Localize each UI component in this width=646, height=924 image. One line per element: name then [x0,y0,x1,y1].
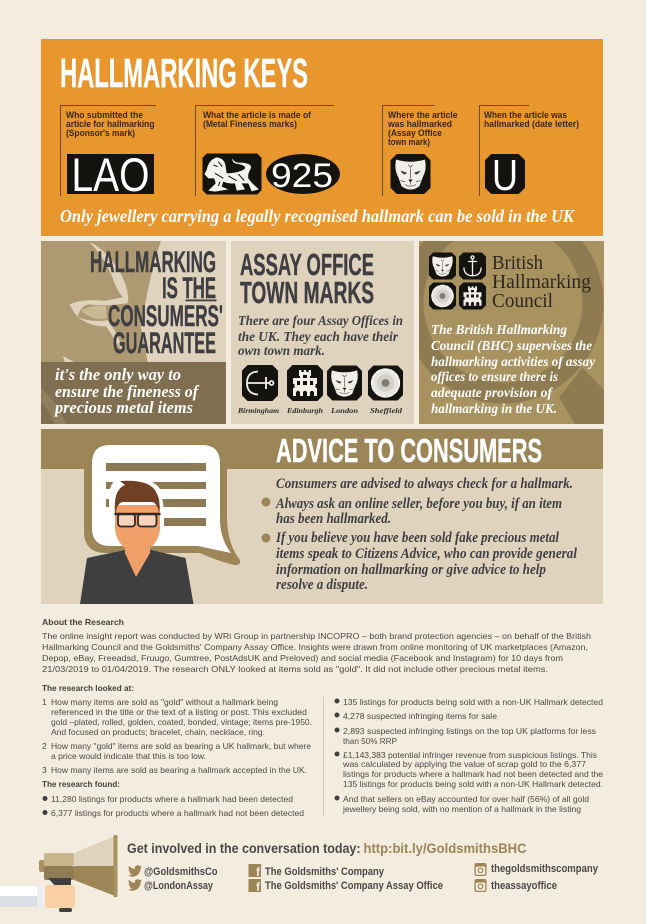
research summary paragraph: Hallmarking Council and the Goldsmiths' Company Assay Office. Insights were drawn from online monitoring of UK marketplaces (Amazon, [42,642,588,652]
heading: hallmarking is the consumers' guarantee: HALLMARKING [90,246,216,279]
social: instagram: thegoldsmithscompany [491,863,599,875]
findings list, right column [334,697,603,814]
town mark: Edinburgh [286,366,323,415]
findings list, right column: £1,143,383 potential infringer revenue from suspicious listings. This [343,750,597,760]
headline: get involved: Get involved in the conversation today: [127,840,360,856]
numbered list [42,697,312,775]
key: date letter: hallmarked (date letter) [484,119,579,129]
key: assay office town mark: town mark) [388,137,430,147]
logo: british hallmarking council: British [492,252,543,274]
town mark: Birmingham [237,366,279,415]
bullet: ask the seller [262,496,562,527]
callout band: only way to ensure fineness: ensure the fineness of [55,382,199,401]
town mark: Sheffield: Sheffield [370,406,402,415]
findings list, right column: 4,278 suspected infringing items for sale [343,711,497,721]
heading: hallmarking is the consumers' guarantee [90,246,223,360]
social: twitter [128,865,218,892]
key: metal fineness marks: (Metal Fineness marks) [203,119,297,129]
logo: british hallmarking council: Hallmarking [492,271,591,293]
panel: advice to consumers [41,429,603,604]
panel: consumers' guarantee [41,241,226,424]
research summary paragraph: The online insight report was conducted by WRi Group in partnership INCOPRO – both brand protection agencies – on behalf of the British [42,631,591,641]
illustration: man with speech bubble [80,438,240,604]
icon: leopard mark [392,155,429,193]
research summary paragraph: 21/03/2019 to 01/04/2019. The research ONLY looked at items sold as "gold". It did not include other precious metal items. [42,664,548,674]
icon: LAO mark: LAO [72,148,150,201]
panel: british hallmarking council [419,241,604,424]
town mark: London [328,366,361,415]
bullet: citizens advice: If you believe you have been sold fake precious metal [275,530,560,546]
numbered list: referenced in the title or the text of a listing or post. This excluded [51,707,307,717]
town mark: Edinburgh: Edinburgh [286,406,323,415]
BHC description: hallmarking activities of assay [431,355,596,370]
leopard face background [41,241,161,363]
panel: assay office town marks [231,241,414,424]
heading: hallmarking is the consumers' guarantee: GUARANTEE [113,327,216,360]
social: twitter: @GoldsmithsCo [144,866,218,878]
social: instagram [474,863,599,892]
key: date letter [480,106,579,200]
social: instagram: theassayoffice [491,880,557,892]
findings list, right column: And that sellers on eBay accounted for over half (56%) of all gold [343,794,589,804]
research summary paragraph [42,631,591,674]
social: twitter: @LondonAssay [144,880,214,892]
town mark: Sheffield [369,366,402,415]
key: assay office town mark [382,106,458,196]
findings list, right column: was calculated by applying the value of scrap gold to the 6,377 [342,759,586,769]
numbered list: How many items are sold as bearing a hallmark accepted in the UK. [51,765,307,775]
icon: date letter U: U [492,151,518,200]
key: sponsor's mark [60,106,156,201]
intro line: Consumers are advised to always check for a hallmark. [276,476,573,492]
section: about the research [42,617,603,818]
icon: 925 mark: 925 [271,157,333,195]
key: metal fineness marks: What the article is made of [203,110,312,120]
key: assay office town mark: was hallmarked [387,119,452,129]
town mark: London: London [330,406,358,415]
heading: assay office town marks: ASSAY OFFICE [240,247,374,282]
findings list, right column: jewellery being sold, with no mention of a hallmark in the listing [342,804,581,814]
findings list, right column: than 50% RRP [343,736,397,746]
key: assay office town mark: (Assay Office [388,128,442,138]
numbered list: And focused on products; bracelet, chain, necklace, ring. [51,727,265,737]
icon: lion mark [203,154,261,194]
icon: megaphone in hand [0,835,118,912]
BHC description: Council (BHC) supervises the [431,339,592,354]
ring background [419,241,604,424]
intro text: There are four Assay Offices in [238,313,403,328]
social: facebook [248,864,443,894]
bullet: citizens advice [262,530,578,593]
social: facebook: f [256,880,261,894]
key: sponsor's mark: article for hallmarking [66,119,154,129]
tagline: Only jewellery carrying a legally recognised hallmark can be sold in the UK [60,206,576,226]
research summary paragraph: Depop, eBay, Freeadsd, Fruugo, Gumtree, PostAdsUK and Preloved) and social media (Facebook and Instagram) for 10 days from [42,653,563,663]
numbered list: 3 [42,765,47,775]
logo: british hallmarking council [430,252,591,312]
social: facebook: The Goldsmiths' Company [265,866,385,878]
logo: british hallmarking council: Council [492,290,553,312]
callout band: only way to ensure fineness: it's the only way to [55,365,181,384]
bullet: citizens advice: resolve a dispute. [276,577,368,593]
subheading: the research looked at: The research looked at: [42,683,134,693]
intro text [238,313,403,358]
callout band: only way to ensure fineness: precious metal items [53,398,193,417]
BHC description [431,323,596,417]
findings list, left column [42,794,304,818]
numbered list: How many items are sold as "gold" without a hallmark being [51,697,278,707]
findings list, left column: 6,377 listings for products where a hallmark had not been detected [51,808,304,818]
numbered list: 2 [42,741,47,751]
link: bit.ly: http:bit.ly/GoldsmithsBHC [364,840,526,856]
heading: hallmarking is the consumers' guarantee: CONSUMERS' [108,300,223,333]
bullet: ask the seller: Always ask an online seller, before you buy, if an item [275,496,562,512]
findings list, right column: listings for products where a hallmark had not been detected and the [343,769,603,779]
BHC description: offices to ensure there is [431,370,558,385]
key: date letter: When the article was [484,110,567,120]
key: sponsor's mark: Who submitted the [66,110,143,120]
subheading: the research found: The research found: [42,779,120,789]
bullet: ask the seller: has been hallmarked. [276,511,391,527]
findings list, right column: 135 listings for products being sold with a non-UK Hallmark detected. [343,779,603,789]
numbered list: gold –plated, rolled, golden, coated, bonded, vintage; items pre-1950. [51,717,312,727]
footer: get involved [0,835,599,912]
intro text: the UK. They each have their [238,329,399,344]
key: metal fineness marks [196,106,340,196]
findings list, left column: 11,280 listings for products where a hallmark had been detected [51,794,293,804]
title: hallmarking keys: HALLMARKING KEYS [60,50,308,96]
bullet: citizens advice: items speak to Citizens Advice, who can provide general [276,546,578,562]
numbered list: 1 [42,697,47,707]
social: facebook: f [256,865,261,879]
BHC description: The British Hallmarking [431,323,567,338]
panel: hallmarking keys [41,39,603,236]
callout band: only way to ensure fineness [41,362,226,424]
heading: about the research: About the Research [42,617,124,627]
heading: assay office town marks: TOWN MARKS [240,275,374,310]
BHC description: hallmarking in the UK. [431,402,557,417]
social: facebook: The Goldsmiths' Company Assay Office [265,880,443,892]
numbered list: How many "gold" items are sold as bearing a UK hallmark, but where [51,741,311,751]
heading: assay office town marks [240,247,374,310]
key: sponsor's mark: (Sponsor's mark) [66,128,135,138]
findings list, right column: 2,893 suspected infringing listings on the top UK platforms for less [343,726,596,736]
BHC description: adequate provision of [431,386,553,401]
numbered list: a price would indicate that this is too low. [51,751,206,761]
key: assay office town mark: Where the article [388,110,458,120]
bullet: citizens advice: information on hallmarking or give advice to help [276,562,546,578]
town mark: Birmingham: Birmingham [237,406,279,415]
findings list, right column: 135 listings for products being sold with a non-UK Hallmark detected [343,697,603,707]
intro text: own town mark. [238,343,325,358]
heading: hallmarking is the consumers' guarantee: IS THE [162,272,216,305]
